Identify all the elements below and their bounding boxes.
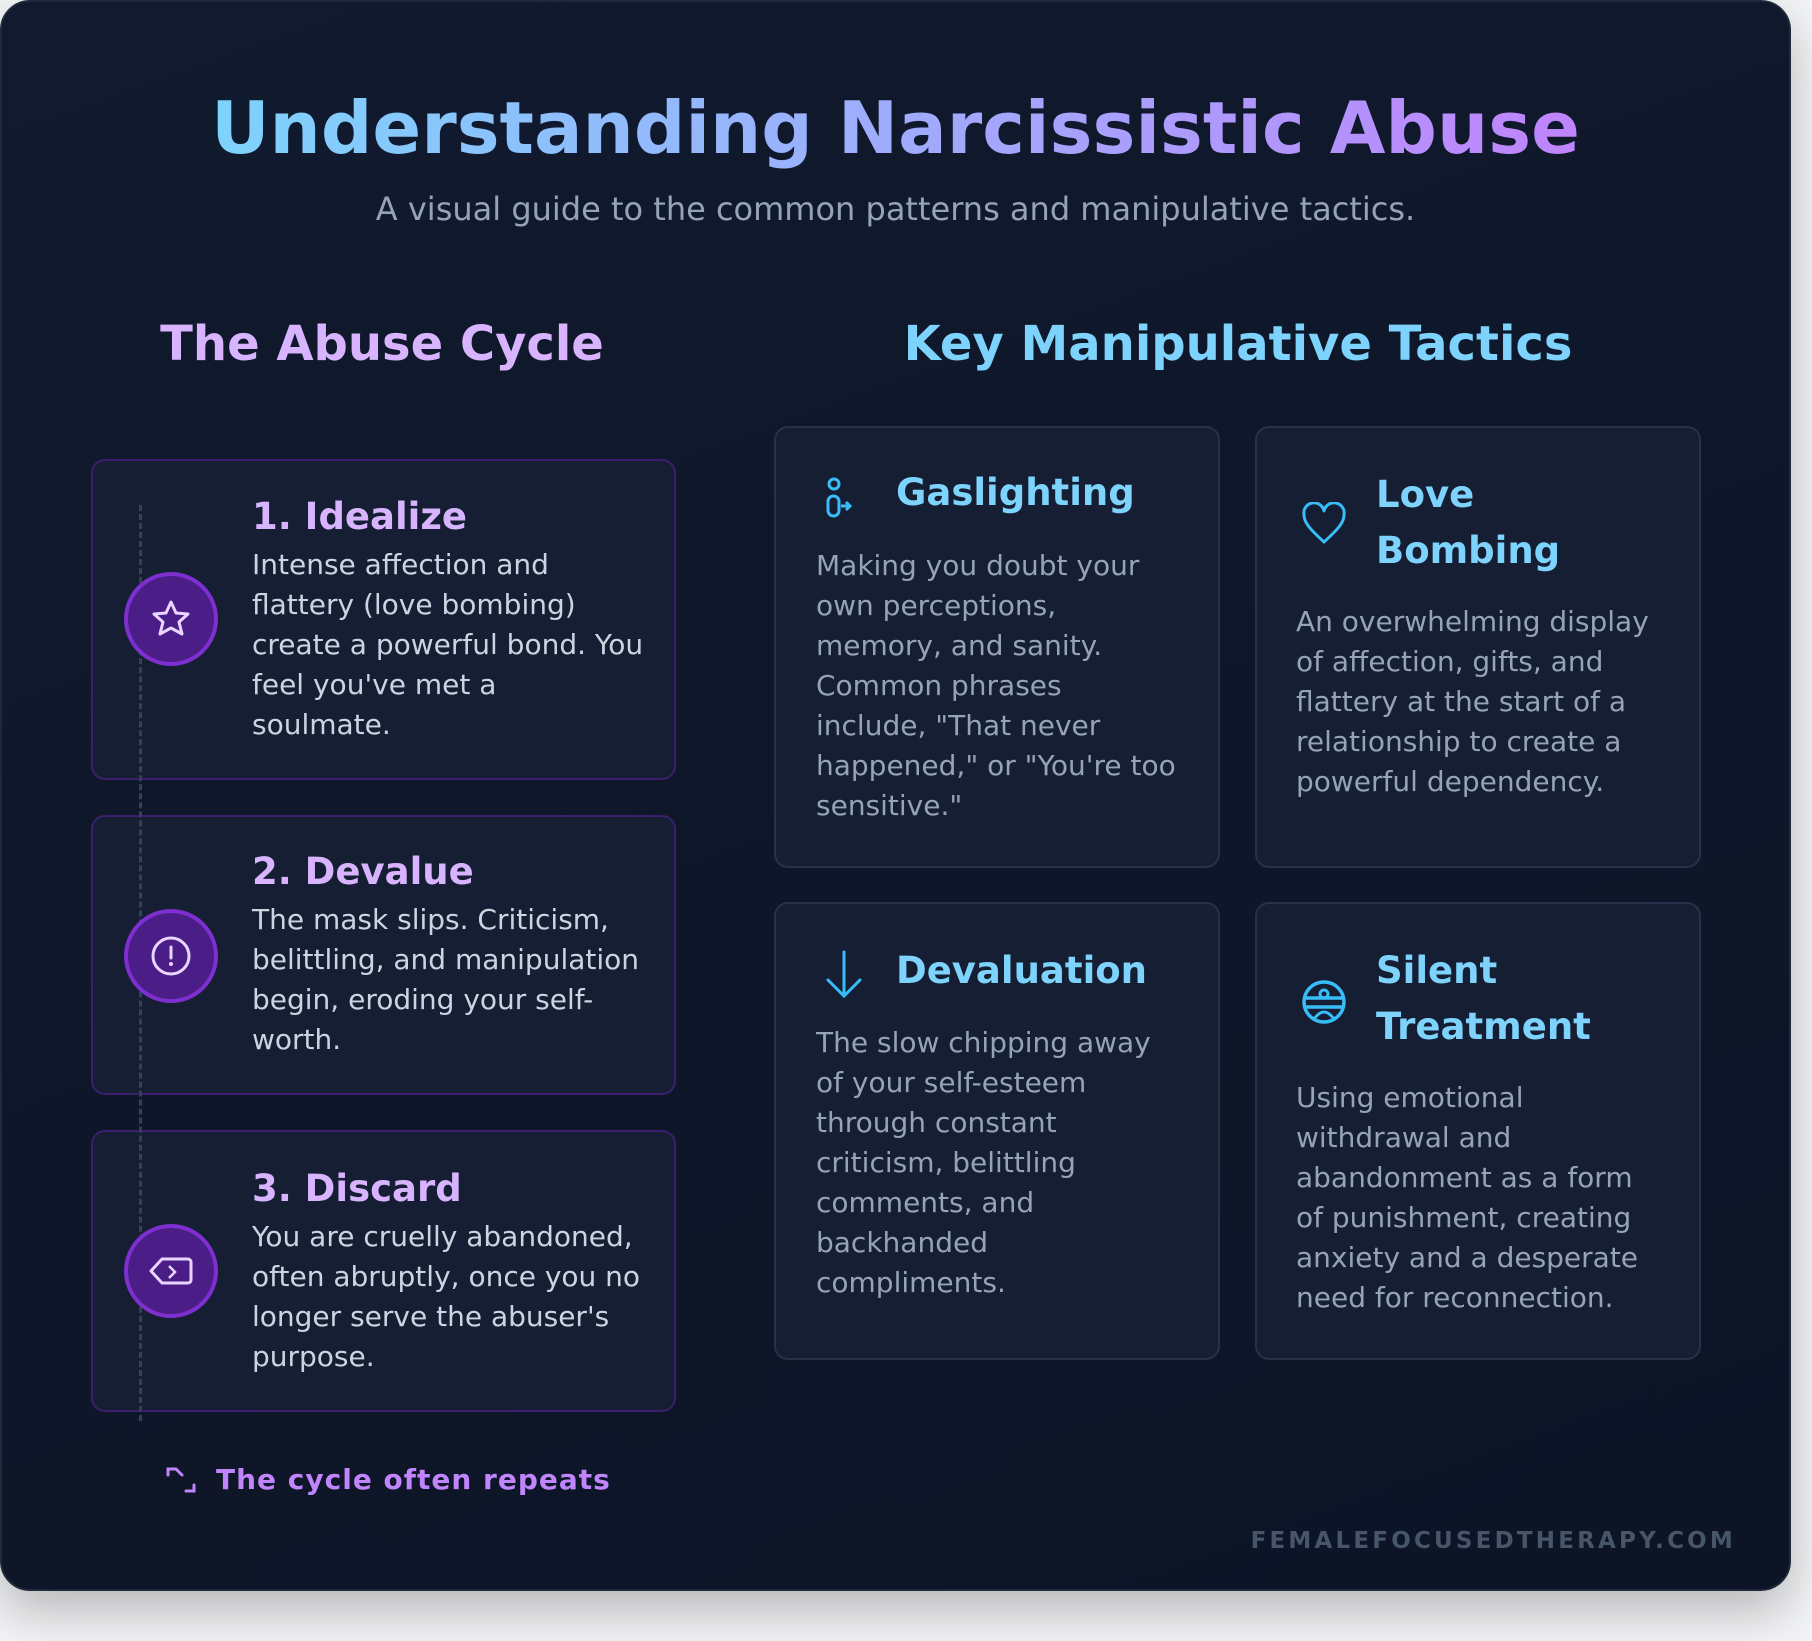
devalue text: 2. Devalue <box>252 850 474 893</box>
card: gaslighting <box>774 426 1220 868</box>
card: silent treatment <box>1255 902 1701 1360</box>
card: devalue <box>91 815 676 1095</box>
title: Treatment <box>1376 1005 1591 1048</box>
card: love bombing <box>1255 426 1701 868</box>
idealize text: 1. Idealize <box>252 495 467 538</box>
card: idealize <box>91 459 676 780</box>
title <box>1376 473 1560 572</box>
body: The slow chipping away of your self-esteem through constant criticism, belittling comments, and backhanded compliments. <box>816 1026 1151 1299</box>
icon: silent <box>1302 980 1346 1024</box>
subtitle: A visual guide to the common patterns and manipulative tactics. <box>376 190 1415 228</box>
title: Understanding Narcissistic Abuse <box>211 86 1580 170</box>
idealize text: soulmate. <box>252 708 391 741</box>
title: Bombing <box>1376 529 1560 572</box>
title: Devaluation <box>896 949 1147 992</box>
icon: down arrow <box>826 950 862 998</box>
card: devaluation <box>774 902 1220 1360</box>
icon: gaslighting <box>826 478 852 518</box>
cycle repeats note: The cycle often repeats <box>216 1463 611 1496</box>
timeline dashed line <box>139 505 142 1421</box>
icon: delete <box>124 1224 218 1318</box>
card: discard <box>91 1130 676 1412</box>
title: Silent <box>1376 949 1497 992</box>
heading: abuse cycle: The Abuse Cycle <box>160 316 604 372</box>
devalue text: The mask slips. Criticism, belittling, and manipulation begin, eroding your self-worth. <box>252 903 639 1056</box>
discard text: You are cruelly abandoned, often abruptly, once you no longer serve the abuser's purpose. <box>252 1220 640 1373</box>
title: Love <box>1376 473 1474 516</box>
body: An overwhelming display of affection, gifts, and flattery at the start of a relationship to create a powerful dependency. <box>1296 605 1649 798</box>
body: Making you doubt your own perceptions, memory, and sanity. Common phrases include, "That never happened," or "You're too sensitive." <box>816 549 1176 822</box>
footer url: FEMALEFOCUSEDTHERAPY.COM <box>1251 1528 1736 1554</box>
heading: tactics: Key Manipulative Tactics <box>904 316 1572 372</box>
idealize text: Intense affection and flattery (love bombing) create a powerful bond. You feel you've met a <box>252 548 643 701</box>
idealize text <box>252 495 643 741</box>
title: Gaslighting <box>896 471 1135 514</box>
title <box>1376 949 1591 1048</box>
icon: star <box>124 572 218 666</box>
body: Using emotional withdrawal and abandonment as a form of punishment, creating anxiety and a desperate need for reconnection. <box>1296 1081 1638 1314</box>
icon: alert <box>124 909 218 1003</box>
icon: heart <box>1302 502 1346 544</box>
discard text: 3. Discard <box>252 1167 462 1210</box>
